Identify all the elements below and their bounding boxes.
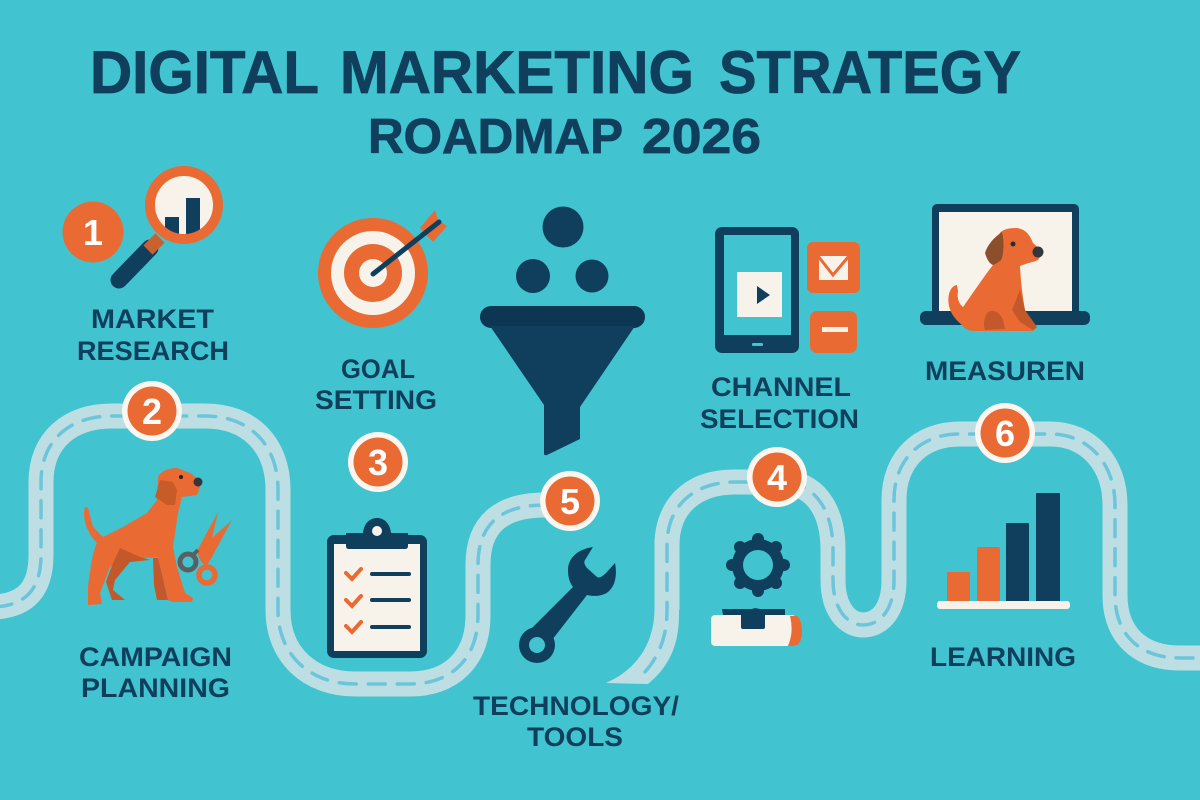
icon: email tile	[807, 242, 860, 293]
step 6 marker: 6	[995, 413, 1015, 454]
label: technology tools: TOOLS	[527, 722, 623, 752]
subtitle: ROADMAP	[368, 110, 623, 164]
label: channel selection	[700, 372, 859, 434]
label: technology tools: TECHNOLOGY/	[473, 691, 680, 721]
icon: minus tile	[810, 311, 857, 353]
icon: dog with scissors	[84, 468, 232, 605]
icon: gear on block	[711, 539, 802, 646]
label: goal setting: GOAL	[341, 354, 415, 384]
icon: laptop with dog	[920, 204, 1090, 331]
label: channel selection: CHANNEL	[711, 372, 851, 402]
step 2 marker	[122, 381, 182, 441]
label: learning: LEARNING	[930, 642, 1076, 672]
label: market research	[77, 304, 229, 366]
label: campaign planning: PLANNING	[81, 673, 230, 703]
step 6 marker	[975, 403, 1035, 463]
step 3 marker: 3	[368, 442, 388, 483]
title: STRATEGY	[719, 39, 1021, 106]
step 1 marker: 1	[83, 212, 103, 253]
subtitle	[368, 110, 761, 164]
step 4 marker: 4	[767, 457, 787, 498]
icon: tablet	[715, 227, 799, 353]
step 1 marker	[62, 202, 124, 262]
icon: magnifying glass	[119, 171, 218, 280]
label: market research: RESEARCH	[77, 336, 229, 366]
label: measuren: MEASUREN	[925, 356, 1085, 386]
label: market research: MARKET	[91, 304, 215, 334]
step 2 marker: 2	[142, 391, 162, 432]
icon: funnel with dots	[480, 206, 645, 455]
subtitle: 2026	[642, 110, 761, 164]
icon: wrench	[519, 547, 616, 663]
label: goal setting: SETTING	[315, 385, 437, 415]
step 3 marker	[348, 432, 408, 492]
title: MARKETING	[340, 39, 694, 106]
step 4 marker	[747, 447, 807, 507]
title	[90, 39, 1021, 106]
icon: target with arrow	[318, 210, 447, 328]
title: DIGITAL	[90, 39, 319, 106]
label: channel selection: SELECTION	[700, 404, 859, 434]
label: campaign planning: CAMPAIGN	[79, 642, 232, 672]
icon: clipboard checklist	[327, 518, 427, 658]
road: left section	[0, 416, 575, 684]
step 5 marker	[540, 471, 600, 531]
bar chart	[937, 493, 1070, 609]
step 5 marker: 5	[560, 481, 580, 522]
label: goal setting	[315, 354, 437, 415]
label: campaign planning	[79, 642, 232, 703]
label: technology tools	[473, 691, 680, 752]
road: right section	[606, 434, 1200, 684]
